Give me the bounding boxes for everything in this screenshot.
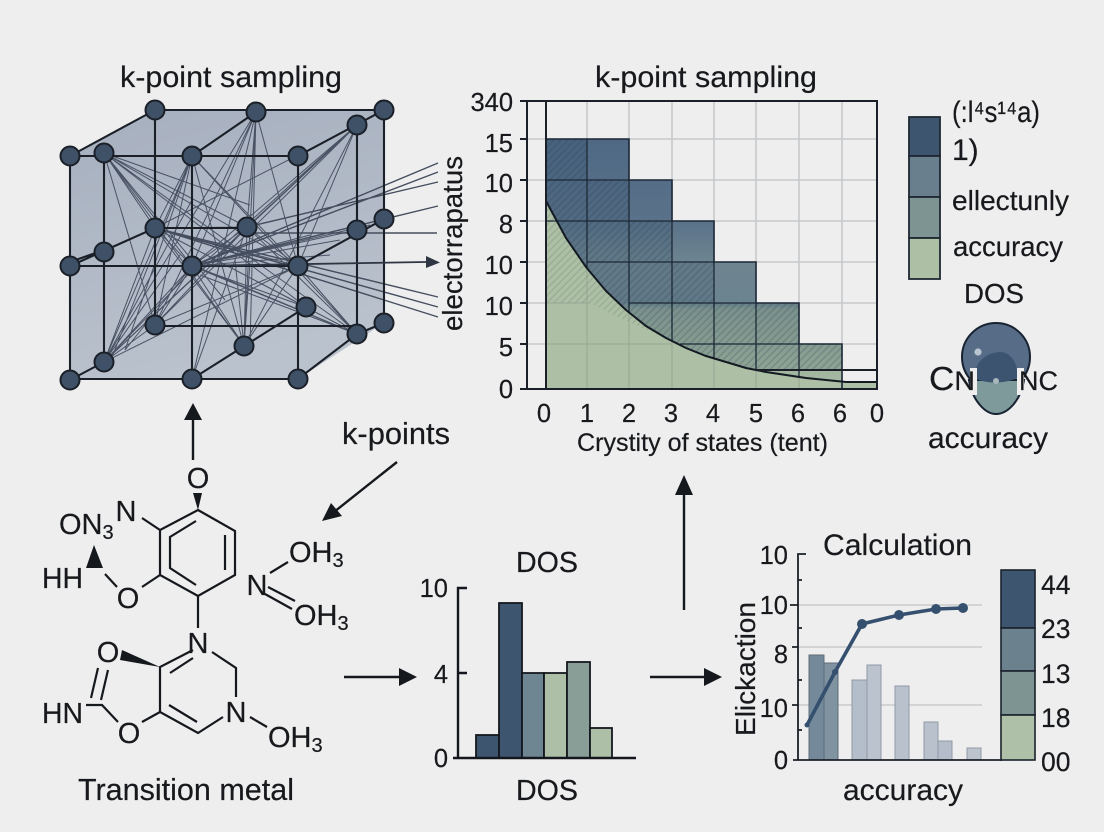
label: Transition metal: Transition metal [78, 772, 294, 807]
legend labels: ellectunly [952, 185, 1069, 216]
label: accuracy: accuracy [928, 422, 1048, 455]
colour bar labels: 44 [1041, 570, 1070, 600]
colour bar labels: 00 [1041, 747, 1070, 777]
y axis labels: 10 [760, 542, 788, 570]
molecule atom labels [42, 463, 349, 757]
orbital labels: CN [929, 360, 975, 397]
colour bar labels: 18 [1041, 703, 1070, 733]
molecule atom labels: OH [289, 537, 332, 569]
icon: orbital [962, 323, 1030, 414]
panel: calculation chart [730, 529, 1070, 807]
label: k-points: k-points [342, 417, 450, 451]
DOS axis labels: 0 [434, 745, 448, 773]
heading: left k-point sampling: k-point sampling [120, 61, 342, 94]
y axis labels: 10 [485, 170, 513, 198]
calculation axes [790, 554, 1002, 760]
outgoing sampling rays [155, 163, 438, 317]
molecule atom labels: N [226, 697, 246, 729]
heading: DOS: DOS [516, 547, 578, 579]
DOS axes [453, 588, 636, 758]
y axis labels: 15 [485, 130, 513, 158]
calculation colour bar [1001, 570, 1035, 760]
legend labels [952, 96, 1069, 262]
reference lines [798, 605, 982, 705]
rotated y title: Elickaction [730, 602, 761, 736]
molecule atom labels: O [118, 718, 140, 750]
panel: legend: NC [1019, 366, 1058, 396]
arrow: cube to electrorapatus [192, 256, 440, 268]
DOS axis labels [420, 575, 448, 773]
y axis labels: 340 [470, 89, 513, 117]
molecule atom labels: O [187, 463, 209, 495]
cube body [70, 110, 384, 380]
y axis labels: 8 [499, 211, 513, 239]
decay curve [546, 201, 877, 382]
chart frame [520, 101, 877, 389]
x title: accuracy: accuracy [843, 774, 963, 807]
x axis labels: 2 [622, 400, 636, 428]
lower gridlines over green [546, 267, 799, 389]
calculation bars [809, 655, 981, 760]
molecule atom labels: ON [59, 509, 102, 541]
heading: Calculation: Calculation [823, 529, 972, 562]
y axis labels: 10 [760, 592, 788, 620]
sampling connection lines [104, 112, 384, 379]
y axis labels: 5 [499, 334, 513, 362]
x axis labels: 6 [791, 400, 805, 428]
panel: DOS bar chart [420, 547, 636, 807]
x axis labels: 5 [749, 400, 763, 428]
legend labels: accuracy [953, 231, 1063, 262]
x label: DOS: DOS [516, 775, 578, 807]
rotated label: electrorapatus: electorrapatus [437, 156, 468, 331]
panel: k-point cube [60, 61, 468, 390]
arrow: up to staircase chart [675, 475, 693, 610]
molecule atom labels: N [116, 496, 136, 528]
y axis labels: 10 [760, 695, 788, 723]
staircase region [546, 139, 842, 389]
y axis labels [760, 542, 788, 775]
x axis labels: 6 [833, 400, 847, 428]
molecule atom labels: N [188, 628, 208, 660]
arrow: molecule to DOS [344, 668, 417, 686]
chart grid [527, 101, 877, 389]
arrow: DOS to calculation [650, 668, 722, 686]
molecule atom labels: HN [42, 698, 83, 730]
molecule atom labels: 3 [338, 613, 349, 635]
y axis labels: 10 [485, 252, 513, 280]
molecule atom labels: 3 [102, 522, 114, 544]
legend DOS heading: DOS [964, 278, 1024, 309]
molecule wedges [86, 493, 202, 667]
legend labels: (:l⁴s¹⁴a) [952, 96, 1040, 129]
DOS axis labels: 4 [434, 661, 448, 689]
molecule atom labels: 3 [312, 735, 323, 757]
y axis labels: 10 [485, 293, 513, 321]
panel: legend [909, 96, 1069, 455]
cube nodes [60, 100, 394, 390]
colour bar labels [1041, 570, 1070, 777]
arrow: k-points to molecule [322, 462, 397, 521]
x axis labels: 3 [664, 400, 678, 428]
colour bar labels: 13 [1041, 659, 1070, 689]
stair outline [546, 139, 842, 389]
y axis labels [470, 89, 513, 404]
DOS bars [476, 603, 612, 758]
stair cell lines [546, 139, 799, 377]
molecule atom labels: OH [294, 600, 338, 632]
cube edges [70, 110, 384, 380]
x axis labels [537, 400, 884, 428]
molecule atom labels: N [247, 570, 267, 602]
calculation line series [804, 603, 968, 728]
molecule atom labels: O [117, 583, 139, 615]
y axis labels: 0 [774, 747, 788, 775]
molecule atom labels: OH [268, 722, 312, 754]
y axis labels: 8 [774, 641, 788, 669]
DOS axis labels: 10 [420, 575, 448, 603]
heading: chart k-point sampling: k-point sampling [595, 61, 817, 94]
x axis labels: 4 [706, 400, 720, 428]
green hatch [546, 201, 665, 338]
molecule atom labels: O [97, 637, 119, 669]
molecule atom labels: HH [42, 563, 83, 595]
x axis labels: 0 [870, 400, 884, 428]
green area under curve [546, 201, 877, 389]
molecule atom labels: 3 [332, 550, 344, 572]
hatched overlay [546, 139, 842, 370]
y axis labels: 0 [499, 376, 513, 404]
legend colour bar [909, 117, 940, 279]
legend labels: 1) [952, 134, 979, 167]
x axis title: Crystity of states (tent) [577, 429, 828, 457]
x axis labels: 0 [537, 400, 551, 428]
panel: molecule [42, 463, 349, 807]
colour bar labels: 23 [1041, 614, 1070, 644]
panel: density staircase chart [470, 61, 884, 457]
molecule bonds [86, 510, 295, 733]
x axis labels: 1 [580, 400, 594, 428]
arrow: molecule up to cube [184, 403, 202, 460]
